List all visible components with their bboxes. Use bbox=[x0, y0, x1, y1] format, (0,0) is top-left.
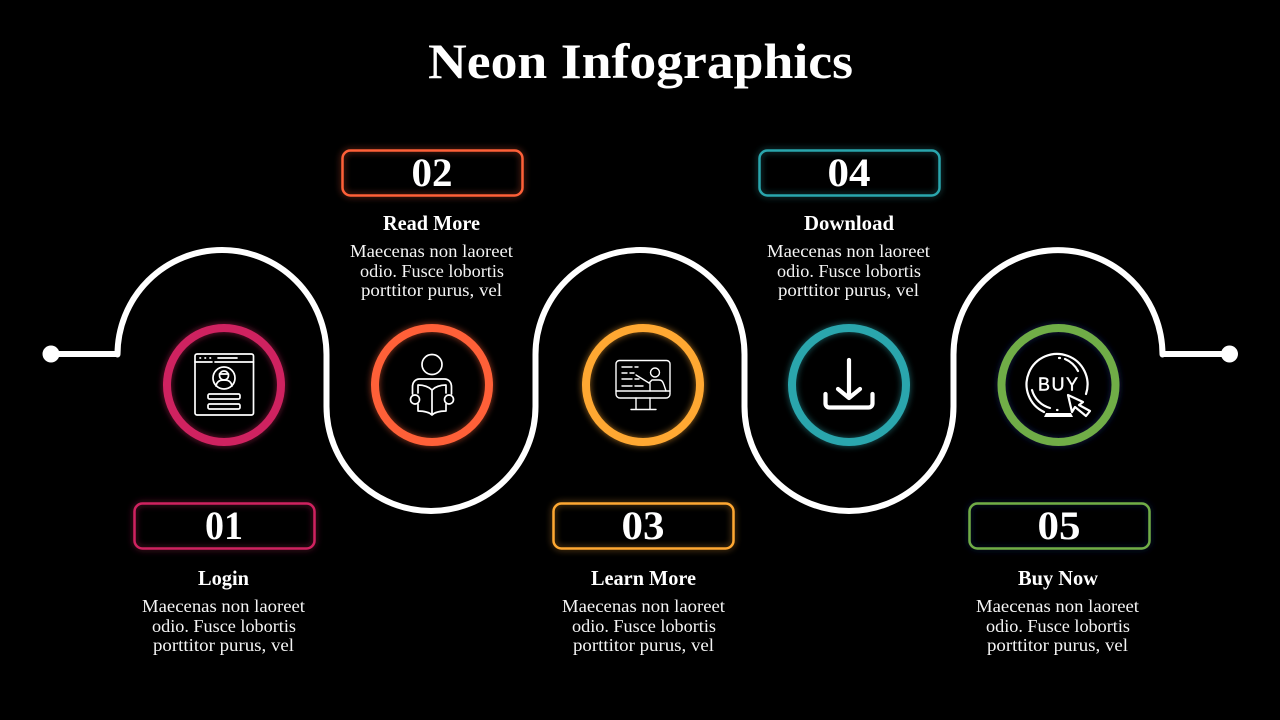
ring 01 bbox=[167, 328, 281, 442]
ring 02 bbox=[375, 328, 489, 442]
number box 02 bbox=[342, 150, 522, 196]
ring 03 bbox=[586, 328, 700, 442]
ring 05 bbox=[1002, 328, 1116, 442]
text block 05: odio. Fusce lobortis bbox=[986, 616, 1130, 636]
step 01: login bbox=[134, 328, 314, 655]
number 01: 01 bbox=[205, 503, 243, 548]
text block 04 bbox=[767, 241, 930, 300]
title: Neon Infographics bbox=[428, 33, 853, 89]
icon: login window bbox=[195, 354, 254, 415]
text block 05: porttitor purus, vel bbox=[987, 635, 1128, 655]
icon: person reading bbox=[410, 354, 454, 415]
icon: buy button with cursor bbox=[1027, 354, 1090, 417]
winding connector line bbox=[42, 250, 1238, 511]
buy label: BUY bbox=[1038, 374, 1078, 394]
text block 02: odio. Fusce lobortis bbox=[360, 261, 504, 281]
text block 05 bbox=[976, 596, 1139, 655]
number 02: 02 bbox=[412, 150, 452, 195]
text block 01 bbox=[142, 596, 305, 655]
text block 03: porttitor purus, vel bbox=[573, 635, 714, 655]
heading: download: Download bbox=[804, 211, 894, 235]
heading: read more: Read More bbox=[383, 211, 480, 235]
number box 04 bbox=[760, 150, 940, 196]
heading: login: Login bbox=[198, 566, 249, 590]
step 03: learn more bbox=[554, 328, 734, 655]
number box 03 bbox=[554, 504, 734, 548]
number 03: 03 bbox=[622, 503, 664, 548]
text block 04: odio. Fusce lobortis bbox=[777, 261, 921, 281]
step 05: buy now bbox=[970, 328, 1150, 655]
icon: online lesson monitor bbox=[616, 360, 670, 410]
text block 03: Maecenas non laoreet bbox=[562, 596, 725, 616]
number 04: 04 bbox=[828, 150, 870, 195]
text block 05: Maecenas non laoreet bbox=[976, 596, 1139, 616]
text block 03 bbox=[562, 596, 725, 655]
text block 01: Maecenas non laoreet bbox=[142, 596, 305, 616]
text block 02: porttitor purus, vel bbox=[361, 280, 502, 300]
number 05: 05 bbox=[1038, 503, 1080, 548]
number box 05 bbox=[970, 504, 1150, 548]
text block 02: Maecenas non laoreet bbox=[350, 241, 513, 261]
text block 02 bbox=[350, 241, 513, 300]
heading: learn more: Learn More bbox=[591, 566, 696, 590]
text block 04: Maecenas non laoreet bbox=[767, 241, 930, 261]
step 04: download bbox=[760, 150, 940, 442]
text block 03: odio. Fusce lobortis bbox=[572, 616, 716, 636]
text block 01: odio. Fusce lobortis bbox=[152, 616, 296, 636]
step 02: read more bbox=[342, 150, 522, 442]
icon: download arrow bbox=[826, 360, 872, 408]
heading: buy now: Buy Now bbox=[1018, 566, 1099, 590]
text block 04: porttitor purus, vel bbox=[778, 280, 919, 300]
text block 01: porttitor purus, vel bbox=[153, 635, 294, 655]
ring 04 bbox=[792, 328, 906, 442]
number box 01 bbox=[134, 504, 314, 548]
